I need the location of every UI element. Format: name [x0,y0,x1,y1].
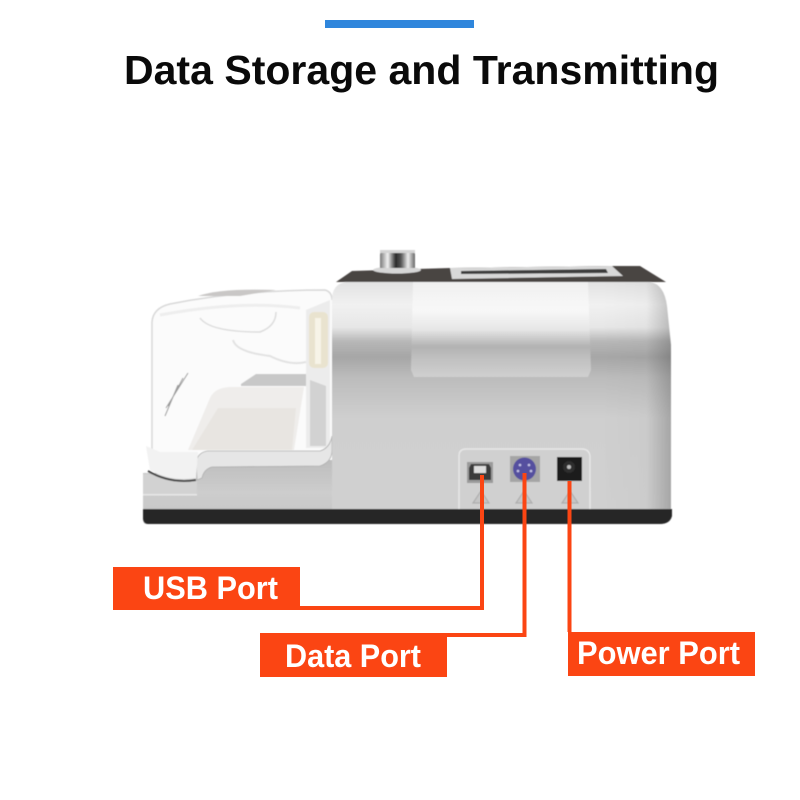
control knob [373,250,421,274]
connector and label: USB Port: USB Port [143,570,278,606]
centre raised panel [411,282,591,377]
display frame [450,266,623,279]
connector and label: Power Port [568,481,755,676]
tank collar seal [309,312,328,368]
power socket [557,457,582,481]
connector and label: Power Port: Power Port [577,635,740,671]
data socket [510,456,540,482]
port plate [459,449,590,509]
arrows under sockets [473,491,578,503]
usb socket [467,462,493,483]
device: humidifier unit [143,250,672,524]
title: Data Storage and Transmitting [124,47,719,93]
tank bottom rim [146,436,332,481]
connector and label: Data Port [260,473,526,677]
connector and label: USB Port [113,475,484,610]
water tank [152,290,332,474]
dark top of main body [336,266,666,282]
connector and label: Data Port: Data Port [285,638,421,674]
main silver body [332,282,671,509]
base and black foot [143,460,672,524]
accent bar [325,20,474,28]
